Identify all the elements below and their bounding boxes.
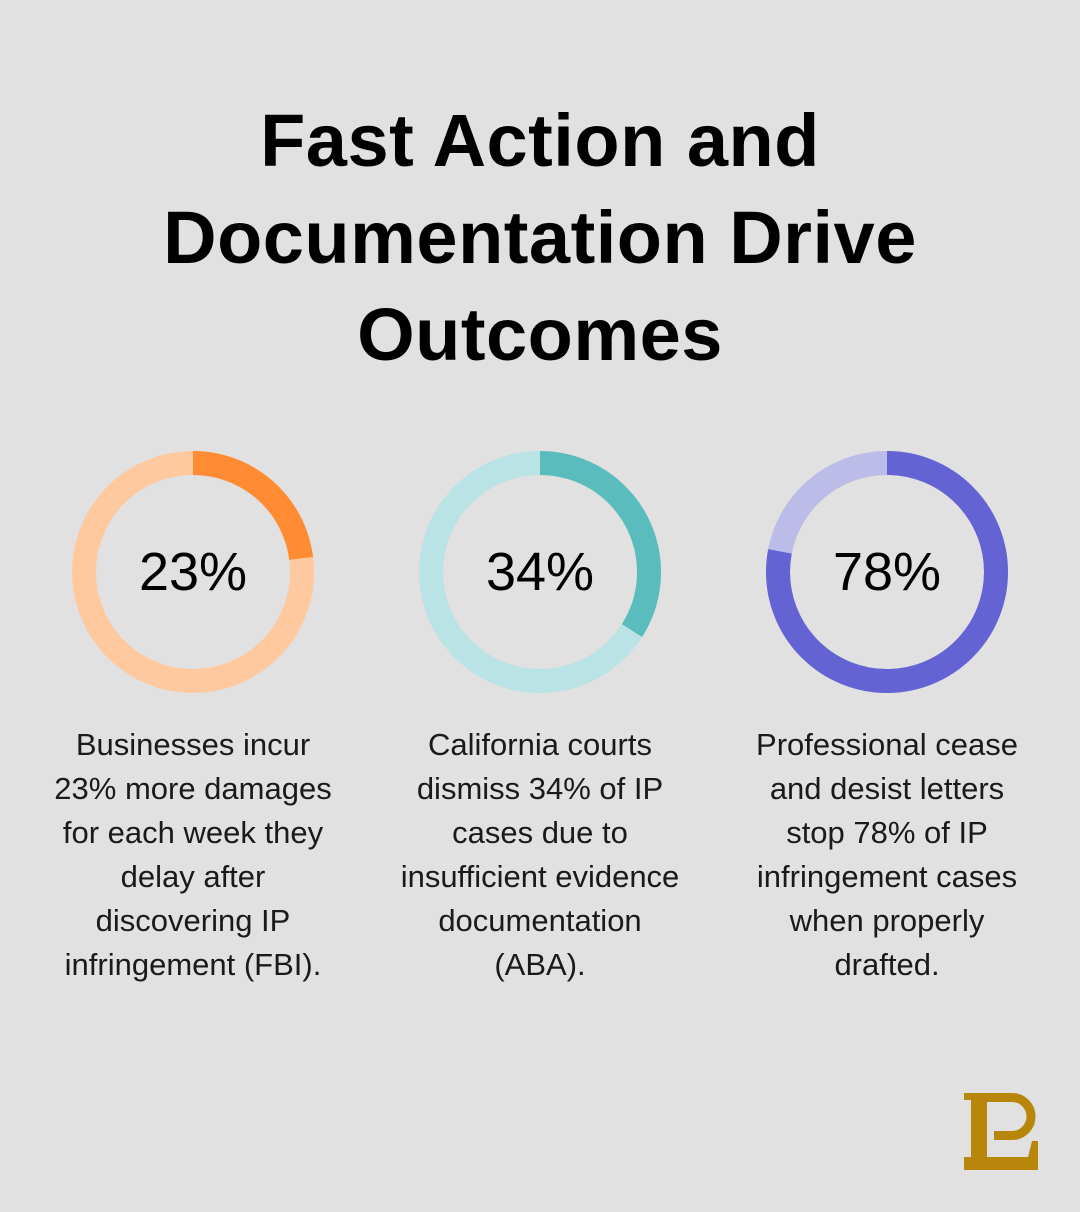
- text: letters: drafted.: [834, 947, 940, 982]
- title: Documentation Drive: [163, 196, 917, 279]
- text: letters: stop 78% of IP: [786, 815, 988, 850]
- text: courts: (ABA).: [494, 947, 586, 982]
- donut chart: 34%: 34%: [486, 542, 594, 602]
- text: damages: infringement (FBI).: [65, 947, 321, 982]
- text: courts: cases due to: [452, 815, 628, 850]
- donut chart: 78%: [766, 451, 1008, 693]
- text: courts: [401, 727, 679, 982]
- text: letters: [756, 727, 1018, 982]
- text: damages: for each week they: [63, 815, 323, 850]
- text: letters: infringement cases: [757, 859, 1017, 894]
- text: letters: when properly: [790, 903, 984, 938]
- donut chart: 23%: 23%: [139, 542, 247, 602]
- text: courts: insufficient evidence: [401, 859, 679, 894]
- donut chart: 34%: [419, 451, 661, 693]
- text: courts: dismiss 34% of IP: [417, 771, 663, 806]
- title: Outcomes: [357, 293, 723, 376]
- title: Fast Action and: [260, 99, 820, 182]
- text: damages: discovering IP: [96, 903, 290, 938]
- text: courts: California courts: [428, 727, 652, 762]
- title: [163, 99, 917, 376]
- text: courts: documentation: [438, 903, 642, 938]
- logo: [964, 1093, 1038, 1170]
- text: damages: delay after: [121, 859, 265, 894]
- text: damages: Businesses incur: [76, 727, 310, 762]
- donut chart: 23%: [72, 451, 314, 693]
- text: damages: [54, 727, 332, 982]
- text: letters: Professional cease: [756, 727, 1018, 762]
- donut chart: 78%: 78%: [833, 542, 941, 602]
- text: damages: 23% more damages: [54, 771, 332, 806]
- text: letters: and desist letters: [770, 771, 1004, 806]
